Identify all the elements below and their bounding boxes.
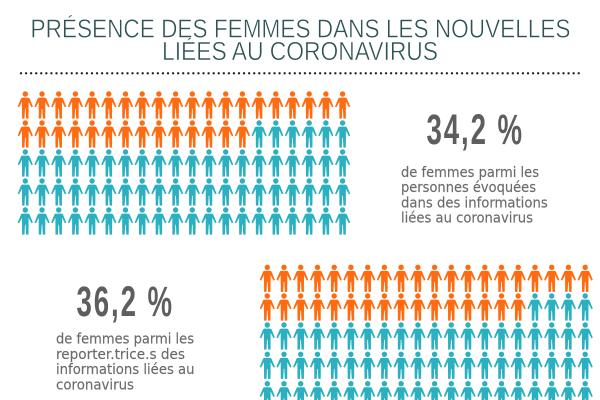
pictogram chart: 34 of 100 persons [18, 91, 350, 235]
text: reporters: reporter.trice.s des [56, 347, 185, 363]
title: LIÉES AU CORONAVIRUS [162, 37, 438, 66]
text: reporters: coronavirus [56, 378, 134, 394]
text: persons mentioned: dans des informations [401, 196, 548, 212]
pictogram chart: 36 of 100 persons [260, 265, 593, 400]
text: persons mentioned: personnes évoquées [401, 180, 536, 196]
text: persons mentioned: liées au coronavirus [401, 210, 533, 226]
statistic: 36,2 %: 36,2 % [76, 278, 174, 326]
text: reporters: informations liées au [56, 362, 194, 378]
text: reporters: de femmes parmi les [56, 332, 194, 348]
text: reporters [56, 332, 194, 394]
title [30, 14, 570, 66]
text: persons mentioned: de femmes parmi les [401, 165, 539, 181]
text: persons mentioned [401, 165, 548, 226]
statistic: 34,2 %: 34,2 % [426, 106, 524, 154]
